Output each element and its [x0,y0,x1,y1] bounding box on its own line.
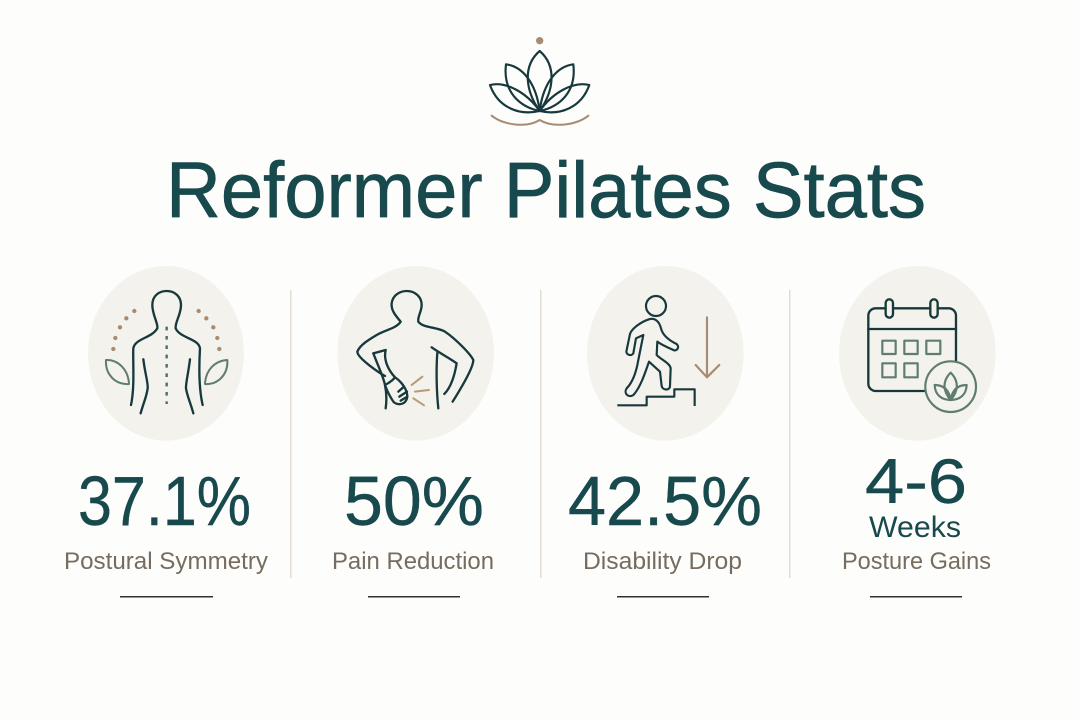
stat: 4-6: 4-6 [865,447,967,517]
icon: person on stairs with down arrow [587,266,744,441]
icon: lotus logo [490,37,589,125]
icon: lower back pain [337,266,494,441]
icon: calendar with lotus badge [839,266,996,441]
label: posture gains: Posture Gains [842,548,991,575]
panel: pain reduction [332,266,494,575]
label: postural symmetry: Postural Symmetry [64,548,268,575]
panel: disability drop [568,266,762,575]
label: pain reduction: Pain Reduction [332,548,494,575]
panel: postural symmetry [64,266,268,575]
stat: 42.5%: 42.5% [568,462,762,540]
stat: 37.1%: 37.1% [78,462,251,540]
label: disability drop: Disability Drop [583,548,742,575]
panel: posture gains [839,266,996,575]
title: Reformer Pilates Stats [166,145,926,234]
icon: back and spine [88,266,244,441]
stat unit: weeks: Weeks [869,511,961,544]
stat: 50%: 50% [344,462,484,540]
